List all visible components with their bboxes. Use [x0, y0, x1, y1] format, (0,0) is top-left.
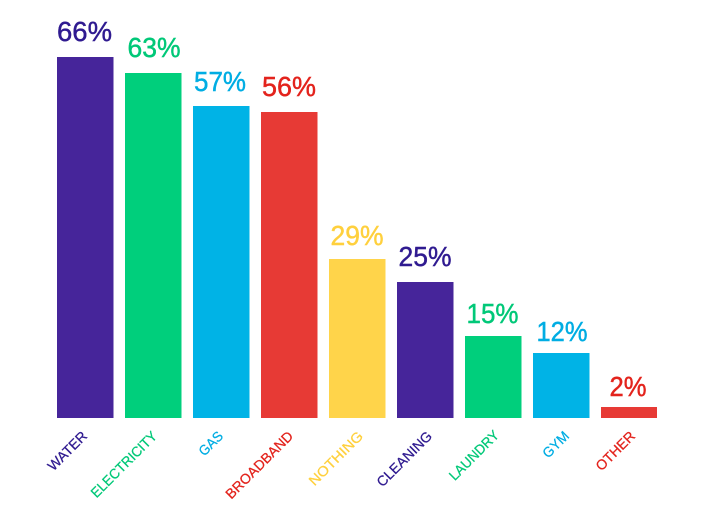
bar: broadband: [261, 71, 318, 418]
bar: electricity: 63%: [128, 32, 180, 63]
bar: cleaning: 25%: [398, 241, 452, 272]
label: nothing: NOTHING: [305, 428, 366, 489]
bar: other: [601, 371, 657, 418]
bar: nothing: [329, 220, 386, 418]
bar: broadband: 56%: [262, 71, 316, 102]
label: gas: GAS: [195, 428, 226, 459]
label: other: OTHER: [592, 428, 638, 474]
label: electricity: ELECTRICITY: [87, 427, 161, 501]
bar: laundry: [465, 298, 522, 418]
bar: gas: 57%: [194, 66, 246, 97]
bar: electricity: [125, 32, 182, 418]
label: cleaning: CLEANING: [373, 428, 435, 490]
bar: laundry: 15%: [466, 298, 518, 329]
bar: water: [57, 16, 114, 418]
label: laundry: LAUNDRY: [446, 426, 503, 483]
bar: gym: [533, 316, 590, 418]
label: water: WATER: [44, 428, 90, 474]
bar: nothing: 29%: [330, 220, 384, 251]
bar: gym: 12%: [536, 316, 588, 347]
bar: water: 66%: [57, 16, 112, 47]
bar: other: 2%: [610, 371, 646, 402]
label: gym: GYM: [539, 428, 572, 461]
bar: gas: [193, 66, 250, 418]
bar: cleaning: [397, 241, 454, 418]
label: broadband: BROADBAND: [222, 428, 296, 502]
